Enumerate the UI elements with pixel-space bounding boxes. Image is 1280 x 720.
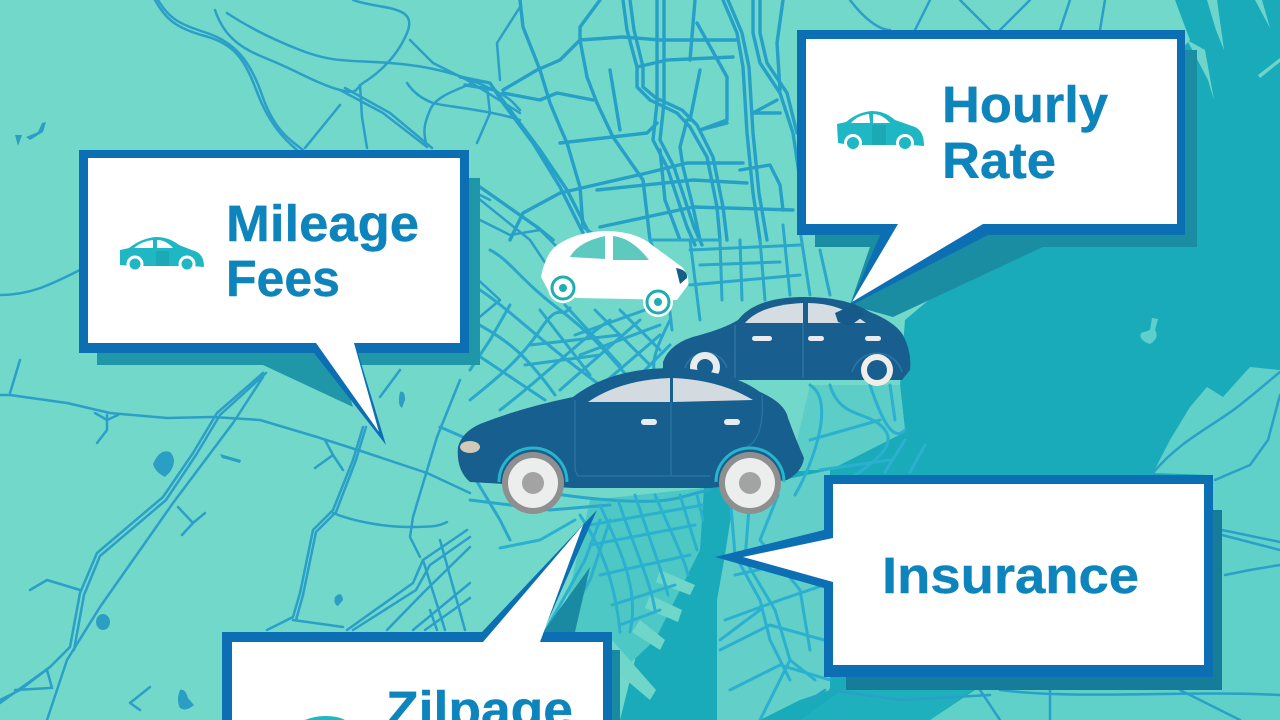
- white car: [541, 231, 688, 317]
- headlight: [460, 441, 480, 453]
- icon: car: [837, 111, 924, 152]
- lakes and ponds: [15, 122, 405, 709]
- wheels: [690, 352, 720, 382]
- road network: central grid: [440, 225, 830, 540]
- land: south of second car: [790, 385, 905, 470]
- road network: upper core: [460, 0, 800, 245]
- callout: hourly rate: Rate: [942, 132, 1056, 189]
- land: eastern shore: [930, 367, 1280, 720]
- label: insurance: Insurance: [882, 547, 1139, 604]
- door seams and arches: [685, 323, 902, 378]
- callout: zilpage: [222, 510, 620, 720]
- wheel arches: [499, 448, 784, 482]
- icon: car: [120, 237, 204, 272]
- windows: [588, 378, 670, 402]
- water: lower channel: [800, 688, 975, 720]
- second car: [663, 297, 910, 386]
- icon: car: [305, 716, 345, 720]
- label: mileage fees: Mileage: [226, 195, 419, 252]
- water: bay: [620, 0, 1280, 720]
- door handles: [641, 419, 657, 425]
- island: [1140, 318, 1158, 344]
- callout: mileage fees: [79, 150, 480, 445]
- land: east of river: [717, 470, 830, 720]
- label: hourly rate: Hourly: [942, 76, 1109, 133]
- land: west of river: [560, 488, 704, 680]
- callout: insurance: [715, 475, 1222, 690]
- main car: [458, 368, 804, 514]
- wheels: [502, 452, 564, 514]
- callout: mileage fees: Fees: [226, 250, 340, 307]
- door seams: [575, 395, 762, 476]
- road network: lower core: [500, 385, 925, 720]
- callout: hourly rate: [797, 30, 1197, 317]
- land: shore bars: [612, 570, 695, 700]
- door handles: [752, 336, 772, 341]
- windows: [745, 303, 803, 323]
